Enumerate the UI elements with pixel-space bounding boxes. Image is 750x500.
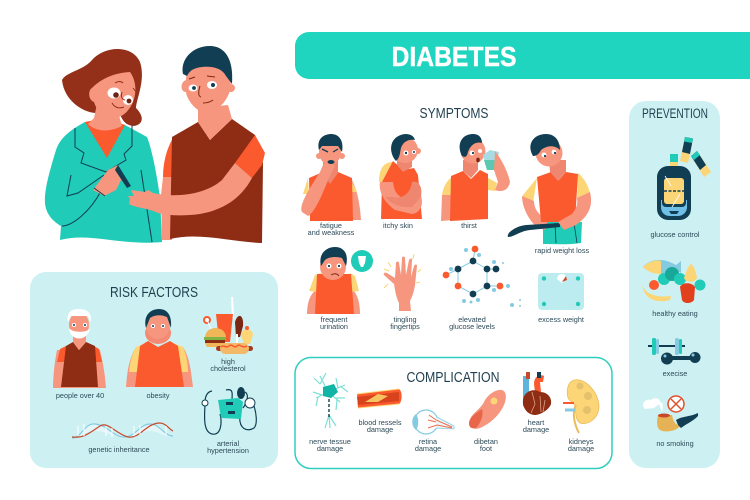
icon: healthy food (642, 260, 706, 303)
label: kidneys damage: damage (568, 444, 594, 453)
icon: blood vessel (357, 389, 402, 408)
doctor (45, 49, 162, 243)
label: excess weight: excess weight (538, 315, 584, 324)
figure: older man (53, 309, 106, 388)
label: retina damage: retina (419, 437, 437, 446)
label: frequent urination: frequent (321, 315, 347, 324)
chart: DNA helix (72, 423, 173, 438)
icon: glucose meter (657, 137, 711, 220)
heading: risk factors: RISK FACTORS (110, 284, 198, 301)
panel: risk factors (30, 272, 278, 468)
icon: blood pressure monitor (202, 387, 256, 434)
label: elevated glucose levels: elevated (458, 315, 486, 324)
icon: junk food (203, 297, 253, 354)
figure: thirst (441, 134, 510, 221)
figure: itchy skin (379, 134, 422, 219)
label: blood vessels damage: damage (367, 425, 393, 434)
icon: retina (412, 410, 454, 434)
label: obesity: obesity (146, 391, 170, 400)
figure: obese man (126, 309, 193, 387)
label: tingling fingertips: fingertips (390, 322, 420, 331)
label: arterial hypertension: arterial (217, 439, 239, 448)
header banner: DIABETES (392, 41, 516, 72)
icon: bathroom scale (538, 273, 584, 310)
panel: symptoms (301, 105, 591, 331)
label: retina damage: damage (415, 444, 441, 453)
icon: glucose molecule (443, 246, 521, 307)
label: kidneys damage: kidneys (569, 437, 593, 446)
heading: symptoms: SYMPTOMS (420, 105, 488, 122)
label: nerve tissue damage: damage (317, 444, 343, 453)
label: frequent urination: urination (320, 322, 348, 331)
header banner (295, 32, 750, 79)
label: high cholesterol: cholesterol (210, 364, 246, 373)
icon: tingling fingers (384, 254, 421, 311)
label: healthy eating: healthy eating (652, 309, 698, 318)
label: heart damage: damage (523, 425, 549, 434)
label: diabetic foot: dibetan (474, 437, 498, 446)
patient (128, 46, 265, 243)
figure: frequent urination (307, 247, 373, 314)
icon: nerve cell (313, 373, 348, 428)
label: thirst: thirst (461, 221, 477, 230)
label: genetic inheritance: genetic inheritance (88, 445, 150, 454)
label: fatigue and weakness: and weakness (308, 228, 355, 237)
label: exercise: execise (663, 369, 687, 378)
icon: kidney (563, 380, 599, 433)
heading: complication: COMPLICATION (406, 369, 500, 386)
label: nerve tissue damage: nerve tessue (309, 437, 351, 446)
label: glucose control: glucose control (650, 230, 700, 239)
label: people over 40: people over 40 (56, 391, 104, 400)
main illustration: doctor and patient (45, 46, 265, 243)
panel: complication (295, 358, 612, 468)
label: tingling fingertips: tingling (393, 315, 417, 324)
figure: fatigue (301, 134, 361, 221)
label: rapid weight loss: rapid weight loss (535, 246, 590, 255)
heading: prevention: PREVENTION (642, 106, 708, 121)
label: itchy skin: itchy skin (383, 221, 413, 230)
label: arterial hypertension: hypertension (207, 446, 249, 455)
label: heart damage: heart (528, 418, 544, 427)
icon: dumbbells (648, 338, 700, 364)
panel: prevention (629, 101, 720, 468)
icon: diabetic foot (469, 390, 506, 429)
label: elevated glucose levels: glucose levels (449, 322, 495, 331)
icon: no smoking pipe (643, 396, 698, 431)
label: diabetic foot: foot (480, 444, 492, 453)
label: high cholesterol: high (221, 357, 235, 366)
label: blood vessels damage: blood ressels (358, 418, 402, 427)
figure: rapid weight loss (508, 134, 591, 244)
label: fatigue and weakness: fatigue (320, 221, 342, 230)
icon: heart (523, 372, 551, 415)
label: no smoking: no smoking (656, 439, 694, 448)
